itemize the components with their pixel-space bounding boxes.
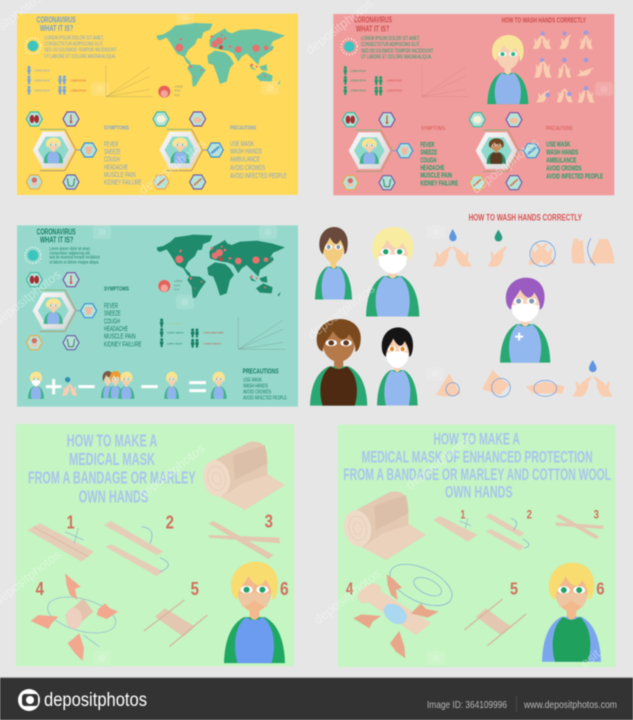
step numbers: 5 [191, 578, 199, 599]
pink symptoms list: KIDNEY FAILURE [420, 180, 458, 187]
yellow population legend: LOREM IPSUM [34, 69, 50, 73]
yellow description: UT LABORE ET DOLORE MAGNA ALIQUA. [44, 54, 116, 60]
yellow precautions list [230, 125, 287, 180]
teal precautions list: AVOID INFECTED PEOPLE [243, 396, 287, 402]
step 1: unrolled bandage strip [433, 516, 478, 542]
depositphotos logo [18, 689, 147, 711]
yellow population legend: LOREM IPSUM [34, 88, 50, 92]
teal line chart [238, 317, 285, 349]
yellow description: LOREM IPSUM DOLOR SIT AMET, [44, 36, 104, 42]
step numbers: 1 [460, 507, 466, 521]
teal symptoms list: SNEEZE [104, 311, 121, 318]
step numbers: 1 [67, 511, 75, 532]
pink symptoms list: MUSCLE PAIN [420, 173, 452, 180]
teal description: ut labore et dolore magna aliqua. [49, 259, 99, 265]
teal symptoms list: COUGH [104, 318, 120, 325]
pink population legend [344, 66, 402, 95]
teal population legend: Lorem ipsum dolor [204, 331, 224, 335]
mask panel title: FROM A BANDAGE OR MARLEY [28, 467, 196, 487]
step 1: unrolled bandage strip [27, 523, 94, 562]
step numbers: 6 [596, 578, 605, 598]
yellow symptoms list: FEVER [104, 141, 118, 148]
pink symptoms list [420, 126, 458, 187]
hand washing steps top row [433, 229, 614, 267]
pink symptoms list: SNEEZE [420, 150, 437, 157]
teal symptoms list: SYMPTOMS [104, 287, 129, 293]
yellow precautions list: AMBULANCE [230, 156, 260, 163]
pink precautions list [546, 126, 603, 181]
enhanced mask title [343, 429, 611, 502]
panel: yellow coronavirus infographic [17, 14, 298, 195]
step 5: tied bandage [464, 599, 526, 646]
panel: women and hand washing on grey [310, 213, 614, 406]
purple hair woman with mask [500, 278, 550, 363]
yellow precautions list: PRECAUTIONS [230, 125, 256, 131]
teal precautions list [243, 366, 287, 402]
step 2: folded strips [485, 513, 529, 551]
pink title: CORONAVIRUS [354, 16, 392, 25]
yellow population legend: LOREM IPSUM [71, 78, 86, 82]
teal world map [157, 235, 285, 298]
pink population legend: LOREM IPSUM [350, 79, 366, 83]
pink virus icon [341, 39, 357, 55]
yellow precautions list: USE MASK [230, 141, 254, 148]
teal symptoms list: KIDNEY FAILURE [104, 341, 142, 348]
yellow infection circle: IPSUM [174, 89, 180, 93]
wash hands heading: HOW TO WASH HANDS CORRECTLY [469, 213, 582, 223]
yellow title: CORONAVIRUS [37, 15, 76, 24]
mask panel title: OWN HANDS [79, 486, 148, 506]
pink precautions hexagon diagram [469, 113, 540, 190]
pink precautions list: AVOID INFECTED PEOPLE [546, 174, 603, 181]
yellow description: SED DO EIUSMOD TEMPOR INCIDIDUNT [44, 48, 117, 54]
teal infection circle [158, 279, 182, 292]
yellow virus icon [25, 38, 41, 54]
teal infection circle: IPSUM [174, 283, 180, 287]
teal precautions list: WASH HANDS [243, 383, 268, 389]
hand washing steps bottom row [436, 360, 613, 397]
panel: how to make a medical mask [16, 424, 294, 666]
woman with brown hair [315, 227, 352, 300]
pink hand washing steps [533, 30, 594, 103]
teal population legend: Lorem ipsum [204, 341, 221, 345]
teal description: sed do eiusmod tempor incididunt [49, 255, 100, 261]
blonde woman with mask [366, 227, 419, 317]
black hair woman with mask [377, 327, 418, 406]
teal symptoms hexagon diagram [26, 273, 97, 350]
mask panel title [28, 431, 196, 506]
yellow title [37, 15, 76, 33]
pink population legend: LOREM IPSUM [387, 89, 402, 93]
step numbers: 4 [346, 578, 354, 598]
yellow symptoms list: COUGH [104, 157, 120, 164]
step 6: woman wearing bandage mask [542, 563, 601, 662]
pink symptoms list: SYMPTOMS [421, 126, 446, 132]
pink symptoms list: HEADACHE [420, 165, 445, 172]
pink population legend: LOREM IPSUM [387, 79, 402, 83]
dark skin woman [310, 319, 367, 406]
watermark text overlay: depositphotos [135, 440, 208, 502]
footer bar [0, 677, 633, 720]
teal infection circle: DOLOR [174, 288, 179, 292]
step numbers: 5 [510, 578, 518, 598]
yellow world map [157, 23, 285, 87]
watermark text overlay: depositphotos [403, 430, 476, 492]
step 4: cotton wool on bandage with hands [353, 556, 458, 658]
pink symptoms hexagon diagram [342, 113, 413, 190]
teal equation: mask + wash minus crowds minus illness equals healthy [28, 371, 227, 399]
yellow population legend [27, 66, 86, 95]
watermark text overlay: osit [578, 646, 603, 670]
teal precautions list: PRECAUTIONS [243, 366, 279, 375]
teal title: CORONAVIRUS [37, 227, 76, 236]
teal description [49, 246, 100, 265]
pink precautions list: AVOID CROWDS [546, 165, 582, 172]
step numbers [36, 511, 289, 599]
pink population legend: LOREM IPSUM [350, 89, 366, 93]
teal virus icon [25, 247, 41, 263]
pink population legend: LOREM IPSUM [350, 69, 366, 73]
yellow symptoms list: KIDNEY FAILURE [104, 180, 142, 187]
panel: how to make a mask of enhanced protection [338, 425, 615, 667]
panel: teal coronavirus infographic [17, 225, 298, 407]
step numbers: 6 [280, 578, 289, 599]
step numbers: 2 [527, 507, 532, 521]
yellow precautions list: WASH HANDS [230, 149, 262, 156]
image id: Image ID: 364109996 [427, 699, 507, 711]
step 3: crossed strips [208, 521, 280, 559]
pink line chart [422, 65, 469, 97]
teal title [37, 227, 76, 245]
watermark text overlay: depositphotos [311, 565, 384, 627]
teal symptoms list [104, 287, 142, 348]
yellow line chart [106, 65, 153, 97]
teal precautions list: AVOID CROWDS [243, 389, 271, 395]
teal symptoms list: MUSCLE PAIN [104, 334, 136, 341]
yellow population legend: LOREM IPSUM [34, 78, 50, 82]
yellow symptoms list: SYMPTOMS [104, 125, 129, 131]
step 5: tied bandage [144, 600, 207, 647]
yellow precautions list: AVOID INFECTED PEOPLE [230, 173, 287, 180]
yellow precautions list: AVOID CROWDS [230, 165, 266, 172]
teal title: WHAT IT IS? [40, 236, 73, 245]
pink description: LOREM IPSUM DOLOR SIT AMET, [361, 36, 420, 42]
yellow symptoms list: HEADACHE [104, 164, 128, 171]
pink precautions list: AMBULANCE [546, 157, 577, 164]
mask panel title: MEDICAL MASK [69, 449, 155, 469]
step 4: folding with hands [31, 573, 120, 661]
pink title: WHAT IT IS? [356, 24, 389, 33]
panel: pink coronavirus infographic [333, 14, 614, 195]
teal precautions list: USE MASK [243, 377, 262, 383]
teal population legend: Lorem ipsum [167, 331, 184, 335]
yellow description: CONSECTETUR ADIPISCING ELIT, [44, 42, 104, 48]
teal symptoms list: FEVER [104, 303, 118, 310]
step numbers: 2 [166, 511, 174, 532]
watermark camera icons [91, 11, 613, 665]
pink description: UT LABORE ET DOLORE MAGNA ALIQUA. [361, 55, 432, 61]
watermark text overlay: depositphotos [136, 135, 209, 197]
teal population legend: Lorem ipsum [167, 341, 183, 345]
yellow title: WHAT IT IS? [40, 24, 73, 33]
mask panel title: HOW TO MAKE A [67, 431, 158, 451]
yellow symptoms list: MUSCLE PAIN [104, 172, 136, 179]
pink description [361, 36, 434, 61]
step 6: woman wearing bandage mask [224, 562, 285, 663]
pink precautions list: WASH HANDS [546, 150, 579, 157]
pink title [354, 16, 392, 33]
yellow infection circle: DOLOR [174, 93, 180, 97]
enhanced mask title: OWN HANDS [445, 483, 513, 502]
step numbers: 3 [594, 507, 599, 521]
yellow infection circle [158, 85, 183, 98]
step numbers: 4 [36, 578, 44, 599]
step numbers: 3 [265, 511, 273, 532]
pink symptoms list: FEVER [420, 142, 434, 149]
pink symptoms list: COUGH [420, 157, 436, 164]
step 2: folded strips [104, 521, 168, 576]
teal symptoms list: HEADACHE [104, 326, 128, 333]
teal infection circle: LOREM [174, 279, 182, 283]
yellow precautions hexagon diagram [153, 112, 223, 189]
watermark text overlay: depositphotos [305, 280, 378, 342]
bandage roll [200, 442, 285, 510]
pink description: CONSECTETUR ADIPISCING ELIT, [361, 42, 420, 48]
pink precautions list: USE MASK [546, 142, 570, 149]
depositphotos logo: depositphotos [44, 690, 147, 711]
pink precautions list: PRECAUTIONS [546, 126, 573, 132]
enhanced mask title: HOW TO MAKE A [433, 429, 520, 448]
yellow symptoms list [104, 125, 142, 187]
yellow description [44, 36, 117, 60]
bandage roll [341, 492, 426, 560]
yellow symptoms list: SNEEZE [104, 149, 121, 156]
yellow infection circle: LOREM [174, 85, 183, 89]
teal description: Lorem ipsum dolor sit amet, [49, 246, 91, 252]
teal population legend [160, 318, 224, 348]
watermark text overlay: depositphotos [469, 134, 542, 196]
step 3: crossed strips [555, 514, 603, 539]
step numbers [346, 507, 605, 598]
pink description: SED DO EIUSMOD TEMPOR INCIDIDUNT [361, 48, 434, 54]
teal population legend: Lorem ipsum [167, 321, 184, 325]
teal description: consectetur adipiscing elit, [49, 250, 91, 256]
yellow symptoms hexagon diagram [26, 112, 97, 189]
pink large woman [487, 35, 528, 104]
yellow population legend: LOREM IPSUM [71, 88, 86, 92]
pink wash hands heading: HOW TO WASH HANDS CORRECTLY [502, 15, 586, 24]
